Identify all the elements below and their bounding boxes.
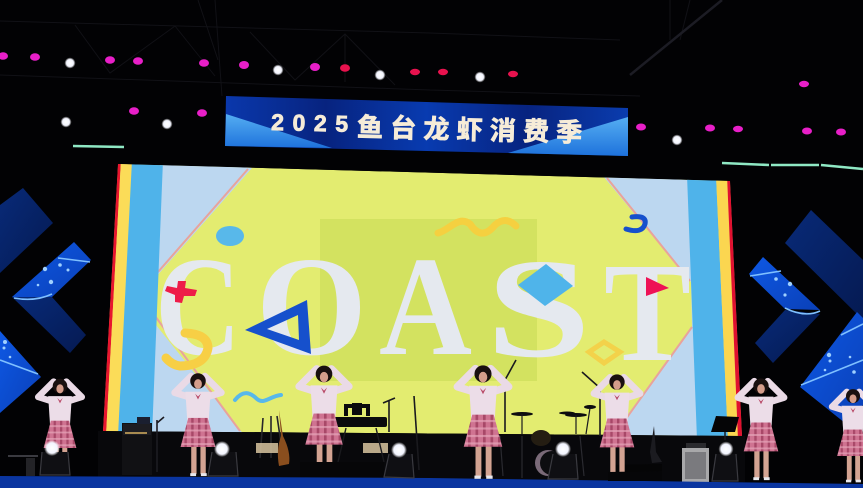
left side props xyxy=(8,455,38,476)
stage riser xyxy=(98,431,745,482)
stage floor xyxy=(0,476,863,488)
yellow diamond ring xyxy=(589,342,620,363)
blue ring arc xyxy=(626,217,645,231)
red cross xyxy=(165,281,197,303)
inner green square xyxy=(320,219,537,381)
mic stands and instruments xyxy=(157,360,600,472)
magenta lights xyxy=(0,52,846,136)
drum kit xyxy=(500,405,596,478)
banner title: 鱼台龙虾消费季 xyxy=(357,107,590,150)
amplifier xyxy=(122,417,152,475)
right chevron screens xyxy=(749,210,863,423)
cyan diamond xyxy=(518,264,573,306)
banner wave left xyxy=(225,114,332,148)
dancer 5 xyxy=(594,374,640,476)
COAST lettering: O xyxy=(256,227,367,385)
dancer 4 xyxy=(457,365,509,479)
bass guitar xyxy=(650,426,662,463)
COAST lettering xyxy=(160,260,689,360)
dancer 1 xyxy=(38,379,82,475)
top banner screen xyxy=(225,96,628,156)
dancer 6 xyxy=(738,378,784,480)
blue ellipse xyxy=(216,226,244,246)
pink diagonal lines xyxy=(155,169,692,434)
light blue corner panels xyxy=(148,160,700,436)
edge stripes right xyxy=(687,175,728,440)
left chevron screens xyxy=(0,188,91,413)
red lights xyxy=(340,64,518,77)
banner wave right xyxy=(508,117,628,156)
yellow wave xyxy=(438,221,516,233)
banner title xyxy=(271,105,590,150)
main LED screen xyxy=(100,160,745,440)
flight case labels xyxy=(256,443,388,453)
music stand xyxy=(711,416,739,440)
red triangle xyxy=(646,277,669,296)
keyboard xyxy=(334,403,387,462)
edge stripes left xyxy=(103,164,121,431)
dancer 7 xyxy=(832,389,863,482)
COAST lettering: S xyxy=(486,229,591,387)
COAST lettering: C xyxy=(155,227,241,385)
ceiling lights xyxy=(0,52,846,146)
ceiling truss xyxy=(0,0,722,96)
front monitor blocks xyxy=(300,462,662,481)
floor spotlights xyxy=(40,440,738,481)
floor speakers xyxy=(608,464,662,481)
dancer 2 xyxy=(175,373,221,476)
screen field xyxy=(103,164,742,436)
blue triangle xyxy=(245,300,311,354)
blue wave xyxy=(235,393,281,401)
white lights xyxy=(60,58,682,146)
green light bars xyxy=(73,146,863,169)
dancer 3 xyxy=(299,366,349,476)
COAST lettering: A xyxy=(379,227,472,385)
yellow crescent xyxy=(166,333,208,366)
COAST lettering: T xyxy=(604,233,691,391)
white flight case xyxy=(682,443,709,482)
banner title: 2025 xyxy=(271,109,357,137)
acoustic guitar xyxy=(278,410,289,466)
